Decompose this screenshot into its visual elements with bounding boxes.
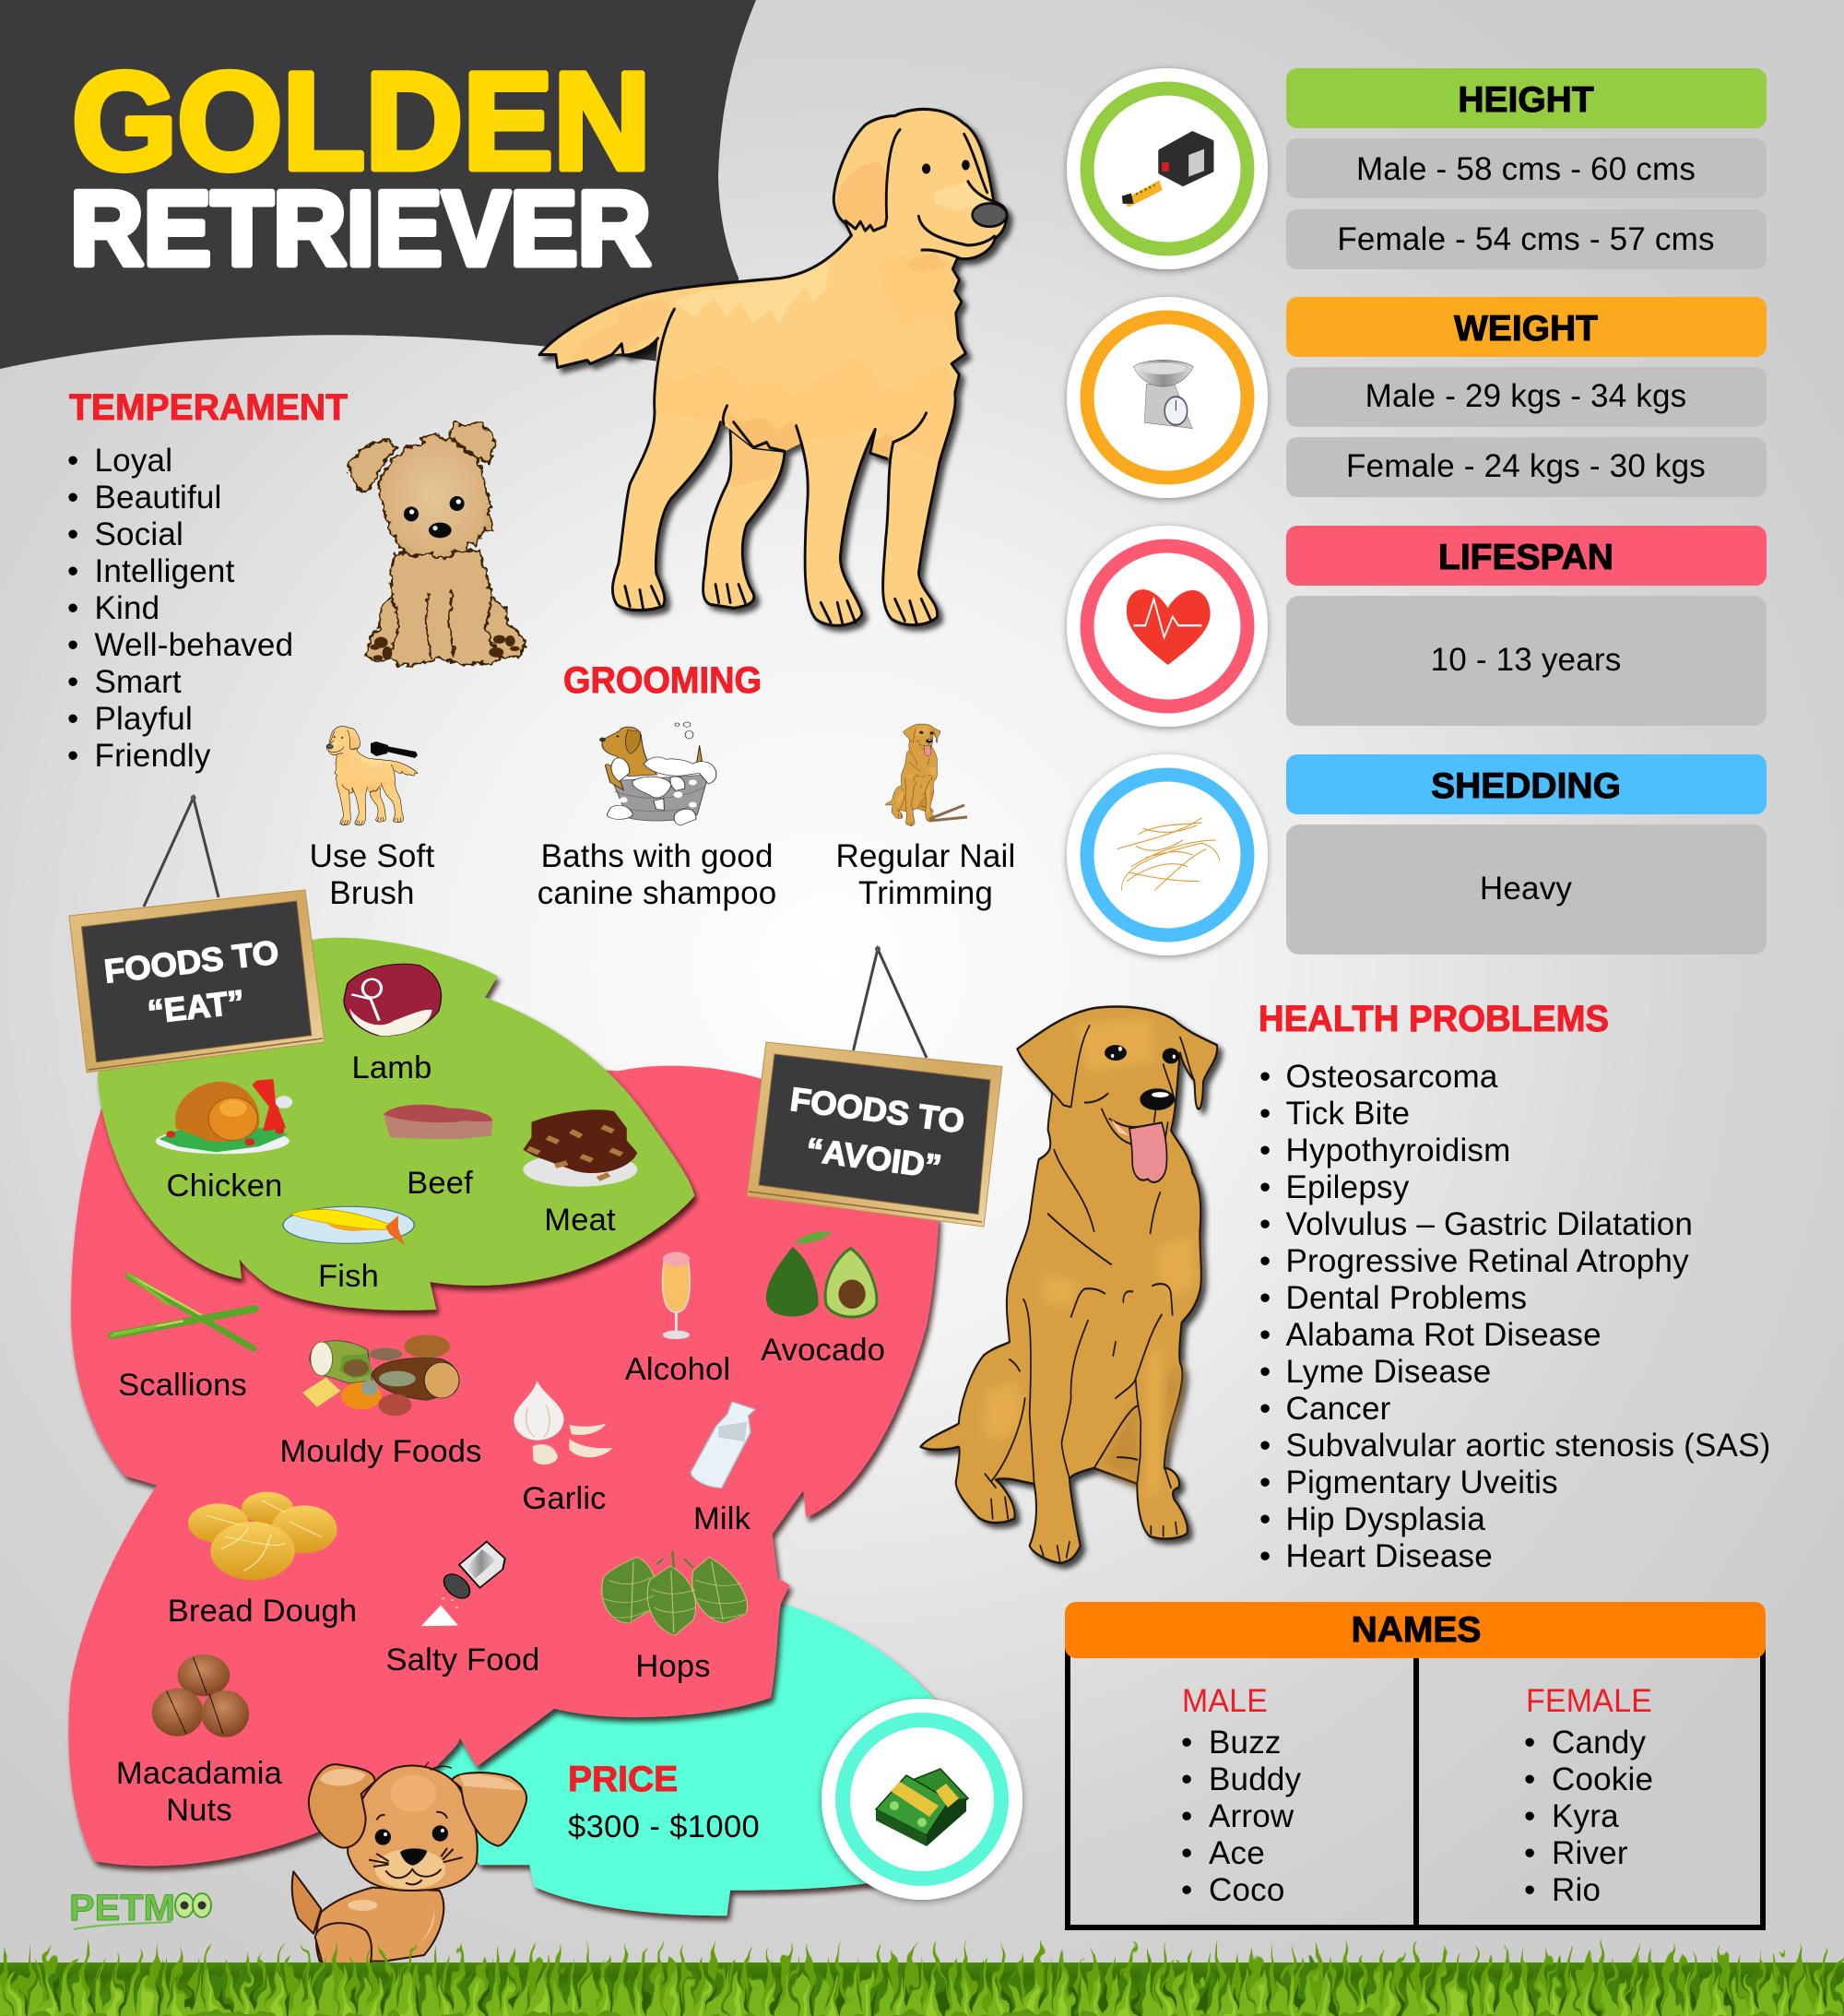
list: temperament: • [67, 627, 78, 663]
list: temperament [67, 443, 293, 774]
food labels: avoid lower [116, 1594, 711, 1828]
icon: roast chicken [156, 1079, 292, 1154]
list: health problems: Pigmentary Uveitis [1285, 1465, 1558, 1500]
panel: foods to eat background [98, 938, 694, 1310]
food labels: eat [166, 1050, 616, 1294]
illustration: standing golden retriever [539, 109, 1007, 625]
icon: fish on plate [283, 1206, 414, 1245]
food labels: eat: Beef [407, 1166, 473, 1201]
text: price range: $300 - $1000 [568, 1809, 760, 1844]
panel: weight: Female - 24 kgs - 30 kgs [1346, 448, 1706, 484]
food labels: eat: Lamb [351, 1050, 432, 1085]
panel: shedding: SHEDDING [1431, 766, 1621, 806]
grass strip [0, 1937, 1844, 2016]
list: health problems: • [1259, 1206, 1271, 1242]
list: health problems: Tick Bite [1285, 1096, 1410, 1132]
list: health problems: Subvalvular aortic stenosis (SAS) [1285, 1428, 1770, 1464]
list: temperament: Well-behaved [94, 627, 293, 663]
food labels: avoid upper [118, 1333, 885, 1536]
sign: foods to avoid: FOODS TO [788, 1080, 966, 1140]
panel: height [1286, 68, 1767, 269]
column: male names: Ace [1209, 1835, 1265, 1871]
list: health problems: • [1259, 1501, 1271, 1537]
icon: beef steak [384, 1105, 492, 1139]
sign: foods to eat: FOODS TO [102, 932, 280, 990]
column: male names: • [1181, 1761, 1192, 1797]
caption: baths: canine shampoo [538, 875, 776, 911]
icon: money badge [822, 1699, 1022, 1900]
panel: names table [1065, 1602, 1766, 1927]
column: female names [1524, 1683, 1653, 1908]
caption: nail trimming [835, 838, 1016, 911]
column: male names [1181, 1683, 1302, 1908]
icon: mouldy foods [302, 1334, 459, 1416]
list: temperament: • [67, 590, 78, 626]
panel: height: Male - 58 cms - 60 cms [1356, 151, 1696, 187]
list: health problems: • [1259, 1317, 1271, 1353]
icon: lamb [344, 964, 441, 1036]
column: female names: River [1552, 1835, 1628, 1871]
panel: weight: Male - 29 kgs - 34 kgs [1365, 378, 1686, 414]
column: female names: Candy [1552, 1725, 1646, 1761]
title: RETRIEVER [70, 171, 651, 288]
list: temperament: • [67, 516, 78, 552]
column: male names: • [1181, 1725, 1192, 1761]
column: male names: Coco [1209, 1872, 1285, 1908]
column: male names: MALE [1182, 1683, 1268, 1719]
food labels: avoid upper: Avocado [761, 1333, 885, 1368]
column: male names: Arrow [1209, 1798, 1294, 1834]
caption: baths: Baths with good [541, 838, 774, 874]
dark title banner [0, 0, 756, 369]
list: temperament: Kind [94, 590, 160, 626]
panel: lifespan: LIFESPAN [1438, 538, 1614, 577]
heading: price: PRICE [568, 1760, 678, 1799]
list: temperament: • [67, 664, 78, 700]
column: male names: Buzz [1209, 1725, 1282, 1761]
panel: names table: NAMES [1352, 1610, 1481, 1650]
list: health problems: • [1259, 1538, 1271, 1574]
caption: baths [538, 838, 776, 911]
panel: height: Female - 54 cms - 57 cms [1337, 221, 1715, 257]
column: female names: • [1524, 1872, 1535, 1908]
caption: use soft brush [310, 838, 434, 911]
panel: lifespan [1286, 526, 1767, 726]
list: health problems: • [1259, 1059, 1271, 1095]
icon: bread dough [188, 1492, 337, 1580]
icon: garlic [514, 1381, 613, 1465]
illustration: sitting dog [920, 1007, 1217, 1563]
column: female names: • [1524, 1798, 1535, 1834]
list: temperament: Social [94, 516, 183, 552]
title: GOLDEN [72, 43, 651, 198]
food labels: avoid lower: Nuts [166, 1793, 232, 1828]
column: female names: Kyra [1552, 1798, 1619, 1834]
column: female names: • [1524, 1835, 1535, 1871]
panel: shedding [1286, 754, 1767, 955]
list: health problems: Alabama Rot Disease [1285, 1317, 1602, 1353]
list: temperament: Loyal [94, 443, 172, 479]
list: health problems: • [1259, 1243, 1271, 1279]
food labels: avoid upper: Scallions [118, 1368, 247, 1403]
icon: milk bottle [691, 1402, 755, 1488]
list: temperament: Intelligent [94, 553, 235, 589]
icon: dog with soft brush [326, 727, 418, 825]
logo: petmoo: PETM [69, 1888, 175, 1928]
caption: use soft brush: Brush [329, 875, 415, 911]
list: health problems: Hip Dysplasia [1285, 1501, 1485, 1537]
heading: grooming: GROOMING [563, 660, 762, 701]
column: female names: FEMALE [1526, 1683, 1652, 1719]
list: temperament: Beautiful [94, 480, 222, 516]
list: health problems: • [1259, 1465, 1271, 1500]
illustration: fluffy puppy [349, 421, 526, 666]
sign: foods to avoid [747, 946, 1002, 1227]
column: male names: • [1181, 1872, 1192, 1908]
sign: foods to eat [69, 795, 325, 1073]
list: health problems: Hypothyroidism [1285, 1133, 1510, 1168]
food labels: avoid upper: Garlic [522, 1481, 607, 1516]
food labels: avoid upper: Mouldy Foods [279, 1434, 482, 1469]
column: male names: • [1181, 1835, 1192, 1871]
column: female names: Cookie [1552, 1761, 1653, 1797]
panel: price background shape [406, 1603, 994, 1915]
column: female names: • [1524, 1761, 1535, 1797]
list: health problems: Lyme Disease [1285, 1354, 1491, 1390]
column: male names: • [1181, 1798, 1192, 1834]
list: temperament: Playful [94, 701, 193, 737]
illustration: cartoon puppy [292, 1762, 526, 1964]
food labels: eat: Fish [318, 1259, 379, 1294]
list: health problems: Epilepsy [1285, 1169, 1410, 1205]
column: male names: Buddy [1209, 1761, 1302, 1797]
food labels: eat: Chicken [166, 1168, 283, 1204]
list: health problems: • [1259, 1280, 1271, 1316]
list: health problems: Cancer [1285, 1391, 1391, 1427]
caption: nail trimming: Regular Nail [835, 838, 1016, 874]
list: health problems: Heart Disease [1285, 1538, 1493, 1574]
list: temperament: • [67, 443, 78, 479]
caption: use soft brush: Use Soft [310, 838, 434, 874]
icon: heart badge [1067, 526, 1268, 727]
sign: foods to eat: “EAT” [146, 982, 246, 1031]
list: health problems: Osteosarcoma [1285, 1059, 1498, 1095]
food labels: avoid upper: Milk [693, 1501, 751, 1536]
list: temperament: • [67, 701, 78, 737]
food labels: avoid upper: Alcohol [625, 1352, 730, 1387]
list: health problems: • [1259, 1391, 1271, 1427]
panel: foods to avoid background [68, 1058, 939, 1866]
panel: height: HEIGHT [1458, 80, 1594, 120]
icon: salt shaker [421, 1542, 505, 1626]
list: health problems: Dental Problems [1285, 1280, 1527, 1316]
heading: health problems: HEALTH PROBLEMS [1259, 999, 1609, 1039]
food labels: avoid lower: Macadamia [116, 1756, 283, 1791]
heading: temperament: TEMPERAMENT [69, 387, 348, 428]
food labels: avoid lower: Bread Dough [168, 1594, 357, 1629]
column: female names: • [1524, 1725, 1535, 1761]
icon: dog with nail clippers [885, 724, 967, 826]
panel: weight: WEIGHT [1454, 309, 1598, 349]
panel: weight [1286, 297, 1767, 497]
list: temperament: Friendly [94, 738, 211, 774]
icon: weighing scale badge [1067, 297, 1268, 498]
icon: hops [602, 1551, 748, 1635]
caption: nail trimming: Trimming [858, 875, 993, 911]
panel: lifespan: 10 - 13 years [1431, 642, 1621, 678]
list: health problems: • [1259, 1169, 1271, 1205]
sign: foods to avoid: “AVOID” [804, 1131, 943, 1186]
list: health problems: • [1259, 1096, 1271, 1132]
icon: ribs meat [523, 1109, 637, 1187]
list: health problems: • [1259, 1133, 1271, 1168]
panel: shedding: Heavy [1480, 871, 1572, 907]
list: temperament: Smart [94, 664, 182, 700]
food labels: avoid lower: Salty Food [386, 1642, 539, 1678]
list: health problems: Progressive Retinal Atrophy [1285, 1243, 1689, 1279]
list: health problems [1259, 1059, 1770, 1574]
icon: alcohol glass [663, 1252, 690, 1339]
list: health problems: • [1259, 1428, 1271, 1464]
title [70, 43, 651, 288]
column: female names: Rio [1552, 1872, 1601, 1908]
icon: macadamia nuts [152, 1654, 249, 1737]
icon: dog in bath tub [599, 722, 716, 825]
list: temperament: • [67, 738, 78, 774]
food labels: eat: Meat [544, 1203, 616, 1238]
icon: avocado [766, 1232, 877, 1317]
icon: tape measure badge [1067, 68, 1268, 269]
list: health problems: • [1259, 1354, 1271, 1390]
list: temperament: • [67, 553, 78, 589]
icon: shed hair badge [1067, 754, 1268, 955]
food labels: avoid lower: Hops [635, 1649, 711, 1684]
icon: scallions [112, 1275, 255, 1348]
list: temperament: • [67, 480, 78, 516]
list: health problems: Volvulus – Gastric Dilatation [1285, 1206, 1693, 1242]
